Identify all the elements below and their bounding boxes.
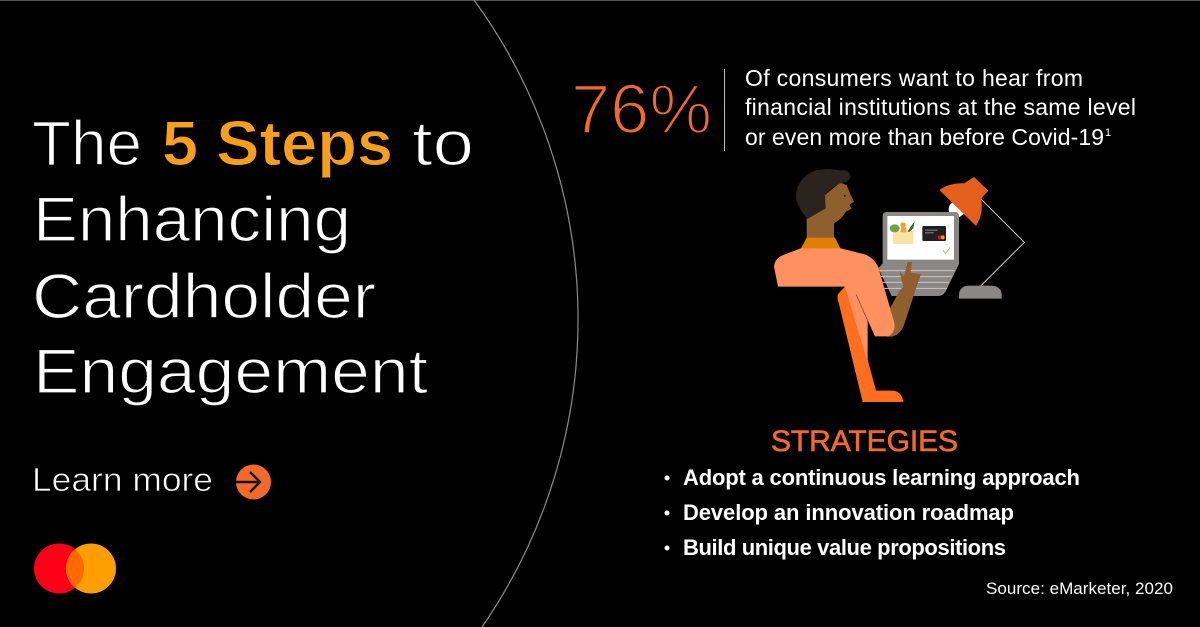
strategies list: Develop an innovation roadmap (683, 500, 1014, 525)
icon: check mark (943, 248, 950, 253)
heading: strategies: STRATEGIES (771, 425, 958, 458)
face and neck (807, 183, 854, 240)
rear leg (837, 287, 903, 402)
title: Engagement (33, 337, 429, 407)
logo: Mastercard circles (34, 544, 116, 594)
icon: payment card (922, 226, 946, 241)
collar (801, 238, 841, 249)
hair (796, 169, 850, 219)
title: Enhancing (33, 185, 351, 255)
statistic description: or even more than before Covid-19 (745, 124, 1104, 150)
statistic description (745, 65, 1136, 150)
learn more link (32, 461, 271, 500)
icon: grocery basket (890, 221, 915, 244)
title: 5 Steps (162, 109, 393, 179)
title: Cardholder (32, 262, 376, 332)
title (32, 109, 474, 407)
icon: arrow button (236, 464, 271, 500)
source note: Source: eMarketer, 2020 (986, 579, 1173, 598)
strategies list: Build unique value propositions (683, 535, 1006, 560)
icon: laptop (878, 212, 959, 296)
title: The (32, 109, 142, 179)
arm and hand (887, 262, 921, 337)
learn more link: Learn more (32, 461, 213, 498)
person (774, 169, 921, 402)
strategies list (664, 465, 1080, 560)
statistic description: 1 (1105, 127, 1111, 139)
torso (774, 248, 895, 363)
statistic description: Of consumers want to hear from (745, 65, 1083, 91)
illustration: person at laptop with lamp (774, 169, 1024, 402)
title: to (412, 109, 474, 179)
strategies list: Adopt a continuous learning approach (683, 465, 1080, 490)
statistic: 76%: 76% (571, 70, 712, 148)
statistic description: financial institutions at the same level (745, 94, 1136, 120)
icon: desk lamp (939, 177, 1024, 299)
